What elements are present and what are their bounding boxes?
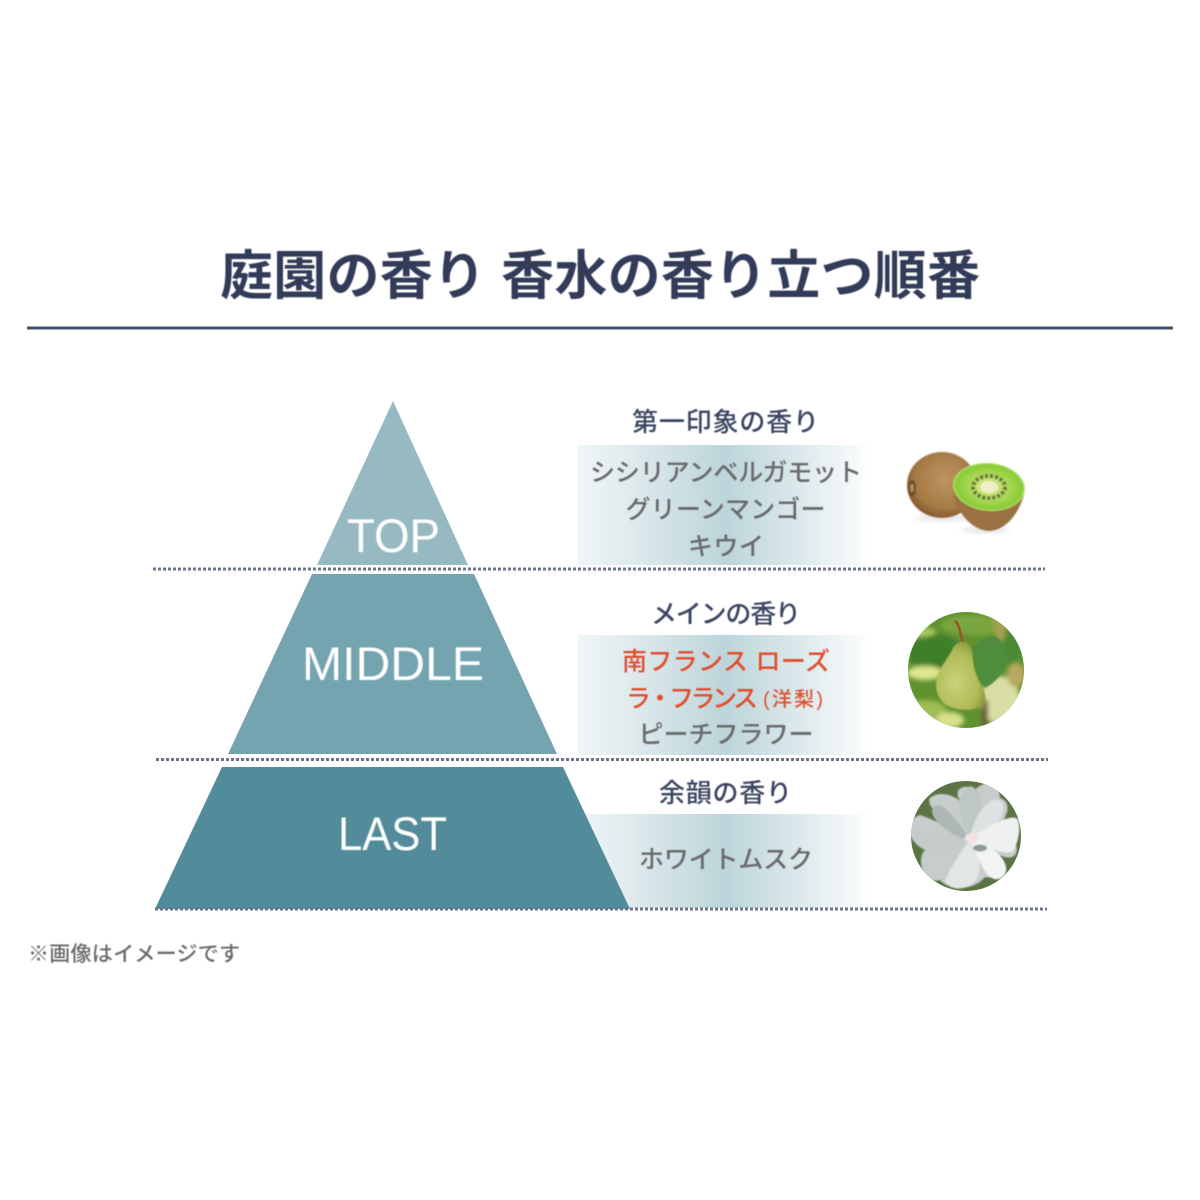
icon: pear photo — [903, 610, 1027, 730]
title underline — [27, 326, 1173, 330]
text block: middle note ingredients: (洋梨) — [763, 688, 823, 711]
text: last note ingredient: ホワイトムスク — [639, 846, 813, 874]
title: 庭園の香り 香水の香り立つ順番 — [220, 247, 980, 306]
heading: top notes: 第一印象の香り — [632, 407, 819, 437]
gradient band: top notes — [578, 445, 872, 565]
label: LAST: LAST — [338, 807, 447, 860]
dotted divider: top/middle — [153, 568, 1045, 570]
text block: top note ingredients: キウイ — [688, 533, 764, 561]
gradient band: middle notes — [578, 635, 872, 755]
icon: white flower photo — [911, 781, 1021, 891]
gradient band: last notes — [578, 814, 872, 908]
text block: middle note ingredients: 南フランス ローズ — [622, 648, 830, 676]
text block: top note ingredients: グリーンマンゴー — [626, 496, 826, 524]
pyramid tier: middle — [228, 574, 557, 754]
pyramid — [155, 401, 630, 909]
text block: top note ingredients: シシリアンベルガモット — [590, 459, 862, 487]
heading: last notes: 余韻の香り — [659, 778, 792, 808]
heading: middle notes: メインの香り — [651, 599, 801, 629]
pyramid tier: last — [155, 767, 630, 909]
label: TOP: TOP — [347, 509, 440, 562]
text block: middle note ingredients: ラ・フランス — [626, 685, 758, 713]
footnote: ※画像はイメージです — [28, 943, 240, 966]
text block: middle note ingredients: ピーチフラワー — [638, 721, 814, 749]
label: MIDDLE: MIDDLE — [302, 637, 484, 690]
text block: top note ingredients — [590, 459, 862, 561]
icon: kiwi photo — [907, 452, 1027, 533]
dotted divider: bottom — [155, 908, 1047, 910]
pyramid tier: top — [317, 401, 468, 565]
dotted divider: middle/last — [156, 758, 1048, 761]
text block: middle note ingredients — [622, 648, 830, 749]
